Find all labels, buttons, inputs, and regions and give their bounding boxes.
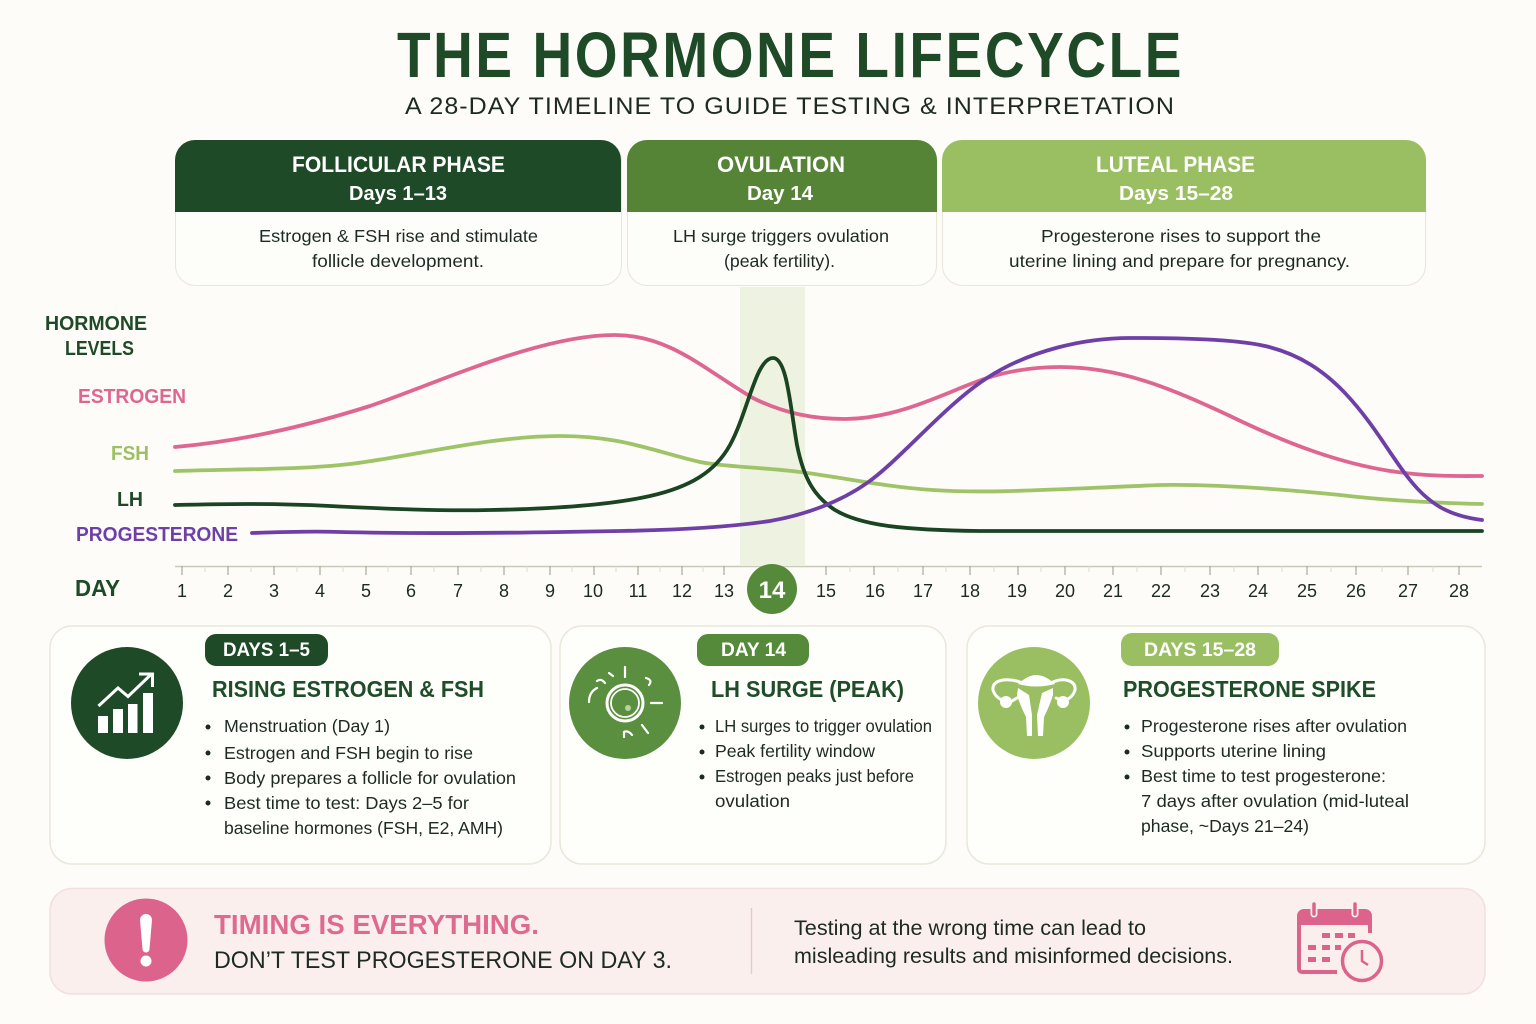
- ovulation description: [673, 226, 889, 271]
- panel: LH surge: [560, 626, 946, 864]
- axis title: hormone levels: HORMONE: [45, 313, 147, 335]
- heading: LH surge: LH SURGE (PEAK): [711, 676, 904, 702]
- bullet list: phase, ~Days 21–24): [1141, 816, 1309, 836]
- day numbers: 1: [177, 581, 187, 601]
- day numbers: 19: [1007, 581, 1027, 601]
- icon: rising bar chart: [71, 647, 183, 759]
- day numbers: 26: [1346, 581, 1366, 601]
- day numbers: 2: [223, 581, 233, 601]
- badge: days 1-5: [205, 634, 328, 666]
- follicular description: Estrogen & FSH rise and stimulate: [259, 226, 538, 246]
- day numbers: 24: [1248, 581, 1268, 601]
- chart: hormone levels: [45, 287, 1482, 565]
- label: FSH: FSH: [111, 443, 149, 465]
- bullet list: Estrogen and FSH begin to rise: [224, 743, 473, 763]
- bullet list: [700, 716, 932, 811]
- day numbers: 9: [545, 581, 555, 601]
- callout explanation: Testing at the wrong time can lead to: [794, 917, 1146, 940]
- day numbers: 8: [499, 581, 509, 601]
- badge: day 14: [697, 634, 809, 666]
- badge: days 15-28: DAYS 15–28: [1144, 639, 1256, 661]
- luteal heading: LUTEAL PHASE: [1096, 152, 1255, 177]
- icon: calendar and clock: [1297, 904, 1382, 980]
- badge: days 1-5: DAYS 1–5: [223, 639, 310, 661]
- label: estrogen: ESTROGEN: [78, 386, 186, 408]
- bullet list: [206, 716, 516, 838]
- panel: ovulation phase: [627, 140, 937, 286]
- day numbers: 3: [269, 581, 279, 601]
- day numbers: 5: [361, 581, 371, 601]
- label: progesterone: PROGESTERONE: [76, 524, 238, 546]
- bullet list: ovulation: [715, 791, 790, 811]
- panel: progesterone spike: [967, 626, 1485, 864]
- follicular heading: FOLLICULAR PHASE: [292, 152, 505, 177]
- day numbers: 15: [816, 581, 836, 601]
- bullet list: LH surges to trigger ovulation: [715, 716, 932, 736]
- label: LH: LH: [117, 489, 143, 511]
- bullet list: baseline hormones (FSH, E2, AMH): [224, 818, 503, 838]
- title: THE HORMONE LIFECYCLE: [397, 19, 1184, 91]
- bullet list: Progesterone rises after ovulation: [1141, 716, 1407, 736]
- icon: exclamation mark: [104, 898, 188, 982]
- callout headline: TIMING IS EVERYTHING.: [214, 909, 539, 940]
- bullet list: Estrogen peaks just before: [715, 766, 914, 786]
- day numbers: 27: [1398, 581, 1418, 601]
- axis title: hormone levels: [45, 313, 147, 360]
- luteal description: uterine lining and prepare for pregnancy.: [1009, 251, 1350, 271]
- icon: uterus: [978, 647, 1090, 759]
- badge: day 14: DAY 14: [721, 639, 786, 661]
- day numbers: 10: [583, 581, 603, 601]
- icon: ovum with rays: [569, 647, 681, 759]
- bullet list: Peak fertility window: [715, 741, 875, 761]
- day 14 marker: [747, 564, 797, 614]
- day numbers: 23: [1200, 581, 1220, 601]
- follicular description: follicle development.: [312, 251, 484, 271]
- callout subhead: DON’T TEST PROGESTERONE ON DAY 3.: [214, 947, 672, 974]
- day numbers: 25: [1297, 581, 1317, 601]
- curve: progesterone: [252, 338, 1482, 533]
- heading: rising estrogen and FSH: RISING ESTROGEN & FSH: [212, 676, 484, 702]
- day numbers: 6: [406, 581, 416, 601]
- panel: follicular phase: [175, 140, 622, 286]
- day numbers: 11: [629, 581, 647, 601]
- day 14 marker: 14: [759, 577, 786, 604]
- badge: days 15-28: [1121, 633, 1279, 666]
- day numbers: 7: [453, 581, 463, 601]
- luteal days: Days 15–28: [1119, 183, 1233, 205]
- ovulation day: Day 14: [747, 183, 814, 205]
- day numbers: 17: [913, 581, 933, 601]
- bullet list: Best time to test: Days 2–5 for: [224, 793, 469, 813]
- curve: estrogen: [175, 335, 1482, 476]
- axis title: hormone levels: LEVELS: [65, 338, 134, 360]
- bullet list: Menstruation (Day 1): [224, 716, 390, 736]
- curve: LH: [175, 358, 1482, 531]
- luteal description: [1009, 226, 1350, 271]
- day numbers: 13: [714, 581, 734, 601]
- day numbers: 18: [960, 581, 980, 601]
- day numbers: 20: [1055, 581, 1075, 601]
- follicular description: [259, 226, 538, 271]
- ovulation heading: OVULATION: [717, 152, 845, 177]
- bullet list: Supports uterine lining: [1141, 741, 1326, 761]
- bullet list: Best time to test progesterone:: [1141, 766, 1386, 786]
- day numbers: 4: [315, 581, 325, 601]
- ovulation description: (peak fertility).: [724, 251, 835, 271]
- bullet list: 7 days after ovulation (mid-luteal: [1141, 791, 1409, 811]
- callout explanation: misleading results and misinformed decisions.: [794, 945, 1233, 968]
- axis title: day: DAY: [75, 575, 120, 601]
- subtitle: A 28-DAY TIMELINE TO GUIDE TESTING & INTERPRETATION: [405, 93, 1175, 120]
- day numbers: 22: [1151, 581, 1171, 601]
- bullet list: Body prepares a follicle for ovulation: [224, 768, 516, 788]
- heading: progesterone spike: PROGESTERONE SPIKE: [1123, 676, 1376, 702]
- day numbers: 16: [865, 581, 885, 601]
- follicular days: Days 1–13: [349, 183, 447, 205]
- curve: FSH: [175, 436, 1482, 504]
- panel: luteal phase: [942, 140, 1426, 286]
- day numbers: 21: [1103, 581, 1123, 601]
- panel: rising estrogen and FSH: [50, 626, 551, 864]
- luteal description: Progesterone rises to support the: [1041, 226, 1321, 246]
- ovulation description: LH surge triggers ovulation: [673, 226, 889, 246]
- bullet list: [1124, 716, 1409, 836]
- callout explanation: [794, 917, 1233, 968]
- ovulation highlight band: [740, 287, 805, 565]
- day numbers: 28: [1449, 581, 1469, 601]
- day numbers: [177, 581, 1469, 601]
- callout: timing is everything: [50, 888, 1485, 994]
- day numbers: 12: [672, 581, 692, 601]
- day axis: [75, 564, 1482, 614]
